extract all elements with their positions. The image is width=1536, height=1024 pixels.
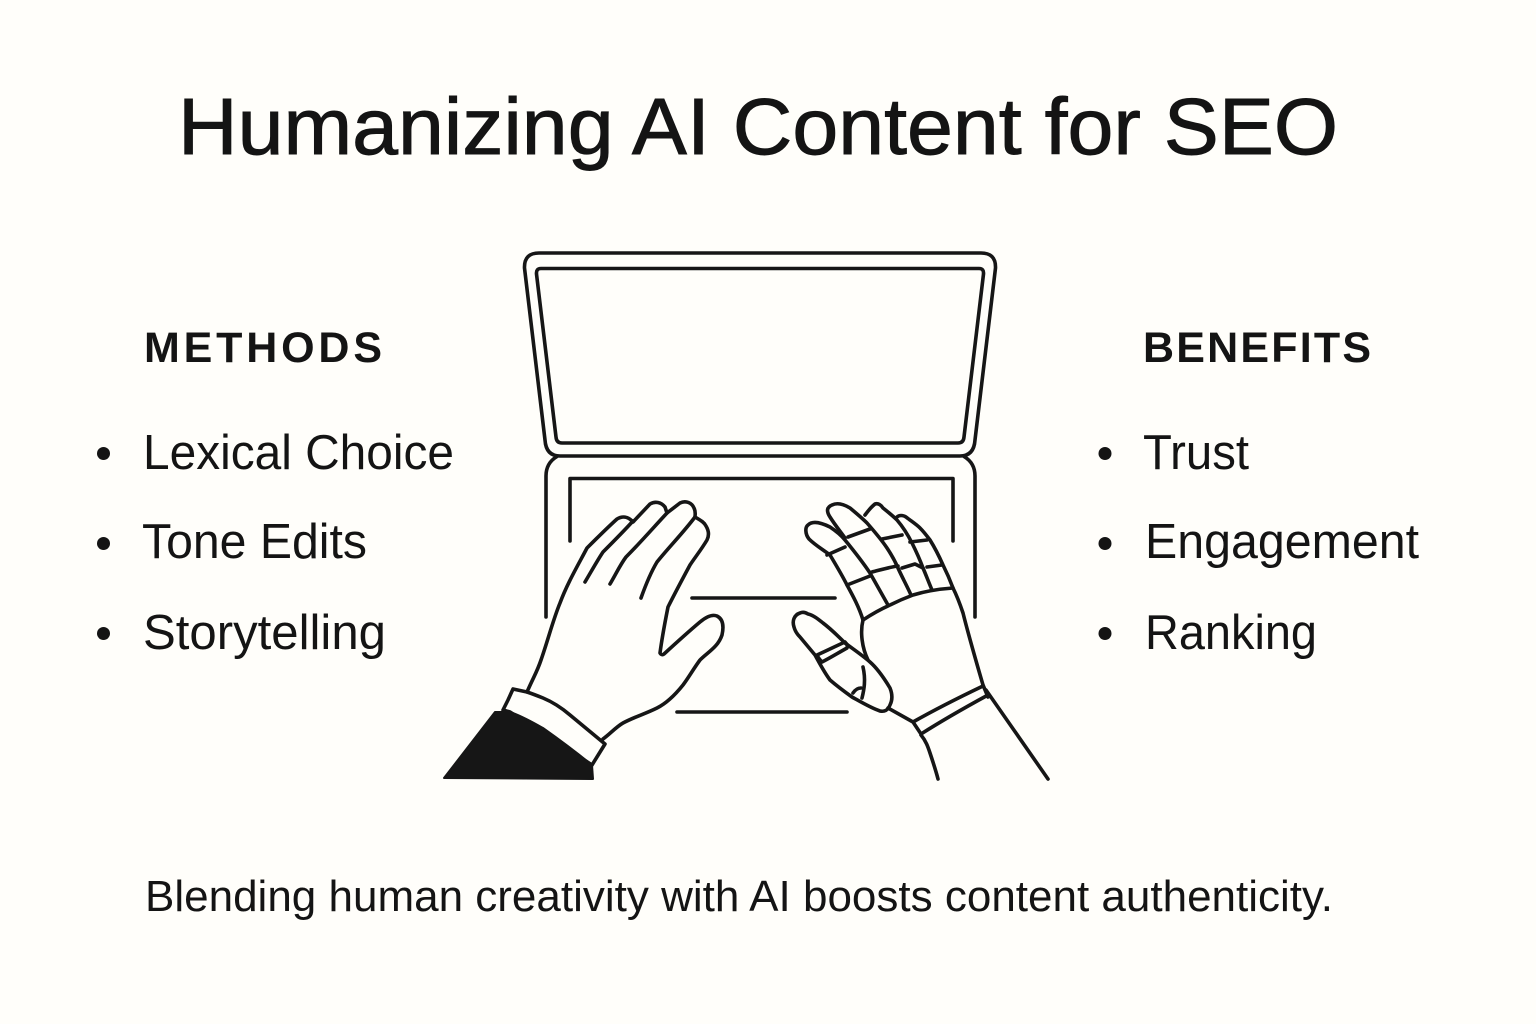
black sleeve xyxy=(444,712,593,779)
panel: methods xyxy=(97,324,454,660)
list item: trust: Trust xyxy=(1143,426,1249,480)
list item: storytelling: Storytelling xyxy=(143,606,386,660)
list item: trust xyxy=(1098,426,1249,480)
robot wrist and cuff xyxy=(888,686,1048,779)
icon: human hand xyxy=(444,502,723,779)
icon: laptop xyxy=(524,253,996,712)
list item: lexical choice: Lexical Choice xyxy=(143,426,454,480)
list item: tone edits: Tone Edits xyxy=(142,515,367,569)
list item: ranking: Ranking xyxy=(1145,606,1317,660)
list item: engagement: Engagement xyxy=(1145,515,1419,569)
title: Humanizing AI Content for SEO xyxy=(178,82,1338,171)
panel: benefits xyxy=(1098,324,1419,660)
footer caption: Blending human creativity with AI boosts content authenticity. xyxy=(145,872,1333,921)
illustration: laptop with human and robot hands xyxy=(444,253,1048,779)
icon: robot hand xyxy=(793,504,1048,779)
robot thumb xyxy=(793,612,892,711)
heading: methods: METHODS xyxy=(144,324,382,372)
human cuff xyxy=(503,689,605,765)
heading: benefits: BENEFITS xyxy=(1143,324,1371,372)
